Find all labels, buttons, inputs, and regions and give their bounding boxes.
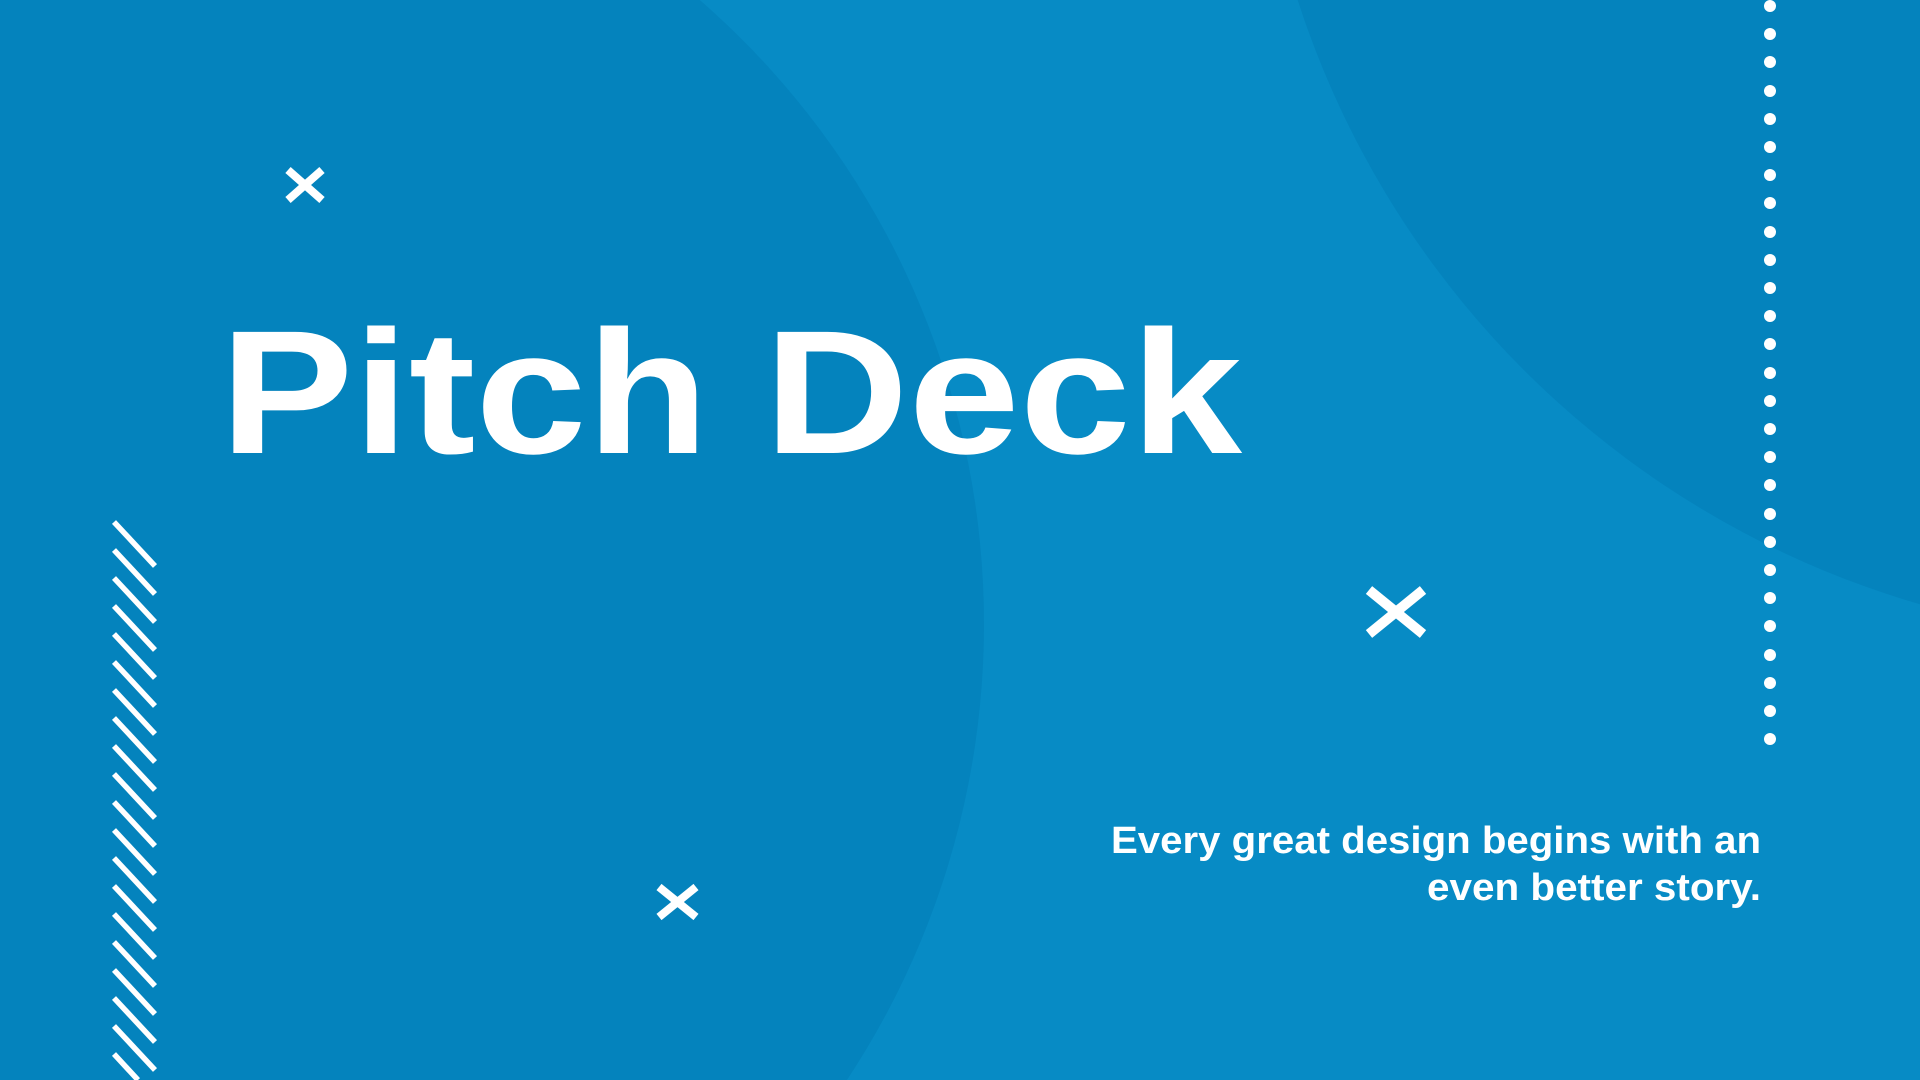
- subtitle: Every great design begins with an: [1111, 820, 1761, 862]
- icon: x mark bottom: [659, 887, 696, 917]
- dotted vertical line: [1764, 0, 1776, 745]
- subtitle: even better story.: [1427, 867, 1761, 909]
- icon: x mark top left: [288, 170, 322, 200]
- subtitle: [1111, 820, 1761, 909]
- title: Pitch Deck: [220, 295, 1243, 491]
- background circle left: [0, 0, 984, 1080]
- background circle top right: [1253, 0, 1920, 641]
- icon: x mark right: [1369, 590, 1423, 634]
- diagonal stripes: [114, 522, 155, 1080]
